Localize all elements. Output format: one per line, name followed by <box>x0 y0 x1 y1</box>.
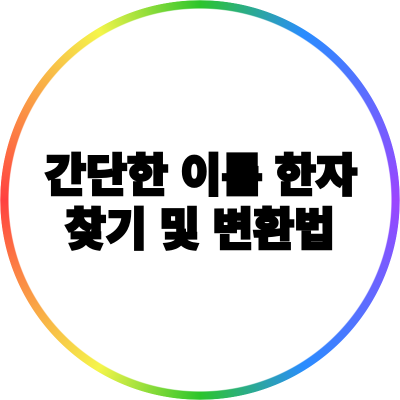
title line 1: 간단한 이름 한자 <box>45 150 357 201</box>
title line 2: 찾기 및 변환법 <box>65 204 335 255</box>
